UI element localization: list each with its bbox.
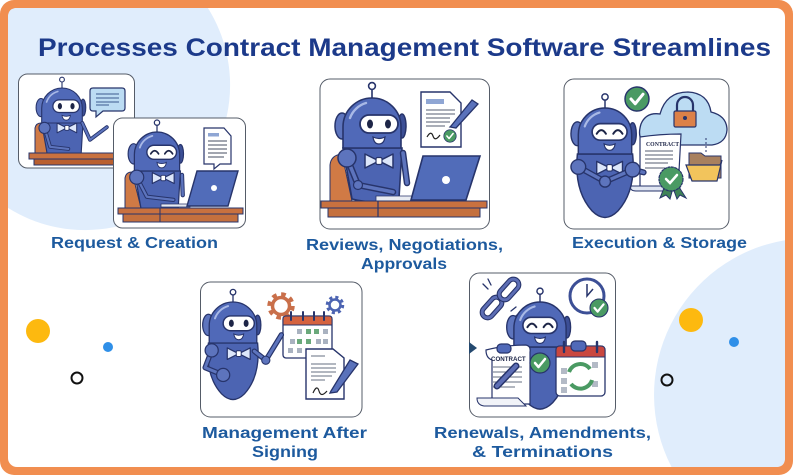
icon: broken chain link [480, 277, 521, 320]
icon: orange gear [270, 294, 292, 318]
icon: signed document and pen [306, 349, 358, 399]
icon: calendar [283, 312, 332, 358]
icon: speech bubble [90, 88, 125, 117]
chair [35, 123, 49, 153]
label: renewals, amendments, terminations: Renewals, Amendments, [434, 425, 651, 442]
dots: right cluster [662, 308, 739, 386]
robot hands [497, 341, 586, 353]
icon: green check [530, 353, 550, 373]
icon: contract scroll: CONTRACT [491, 356, 526, 363]
decorative circle: bottom right [654, 240, 785, 467]
label: management after signing: Management After [202, 425, 367, 442]
label: reviews, negotiations, approvals: Reviews, Negotiations, [306, 237, 503, 254]
chair [330, 154, 352, 201]
robot [335, 83, 407, 202]
icon: document bubble [204, 128, 231, 169]
label: management after signing: Signing [252, 444, 318, 461]
robot [571, 94, 644, 217]
panel: management card [200, 282, 362, 417]
label: reviews, negotiations, approvals: Approvals [361, 256, 447, 273]
icon: signed document and pen [421, 92, 478, 147]
label: reviews, negotiations, approvals [306, 237, 503, 273]
laptop [376, 156, 480, 201]
icon: clock [570, 279, 608, 317]
icon: contract scroll: CONTRACT [646, 142, 679, 148]
icon: folder [686, 138, 722, 181]
robot [203, 289, 281, 400]
label: execution and storage: Execution & Storage [572, 235, 747, 252]
dots: left cluster [26, 319, 113, 384]
panel: request card back [18, 74, 134, 168]
title: Processes Contract Management Software Streamlines [38, 34, 771, 62]
panel: execution card [564, 79, 729, 229]
robot [128, 120, 184, 213]
chair [125, 172, 141, 208]
icon: green seal [659, 167, 686, 199]
label: management after signing [202, 425, 367, 461]
laptop [161, 171, 238, 207]
icon: cloud with lock [640, 92, 727, 145]
icon: contract scroll [477, 345, 530, 406]
icon: blue gear [328, 298, 342, 312]
label: request and creation: Request & Creation [51, 235, 218, 252]
icon: green check [625, 87, 649, 111]
panel: request card front [114, 118, 246, 228]
label: renewals, amendments, terminations [434, 425, 651, 461]
panel: reviews card [320, 79, 490, 229]
triangle marker [469, 342, 477, 354]
label: renewals, amendments, terminations: & Terminations [472, 444, 613, 461]
icon: calendar with renewal arrows [556, 342, 605, 396]
desk [118, 208, 243, 222]
desk [321, 201, 487, 217]
decorative circle: top left [8, 8, 230, 230]
panel: renewals card [469, 273, 616, 417]
desk [29, 153, 117, 165]
robot [36, 77, 107, 161]
icon: contract scroll [630, 134, 681, 191]
robot [507, 288, 571, 409]
